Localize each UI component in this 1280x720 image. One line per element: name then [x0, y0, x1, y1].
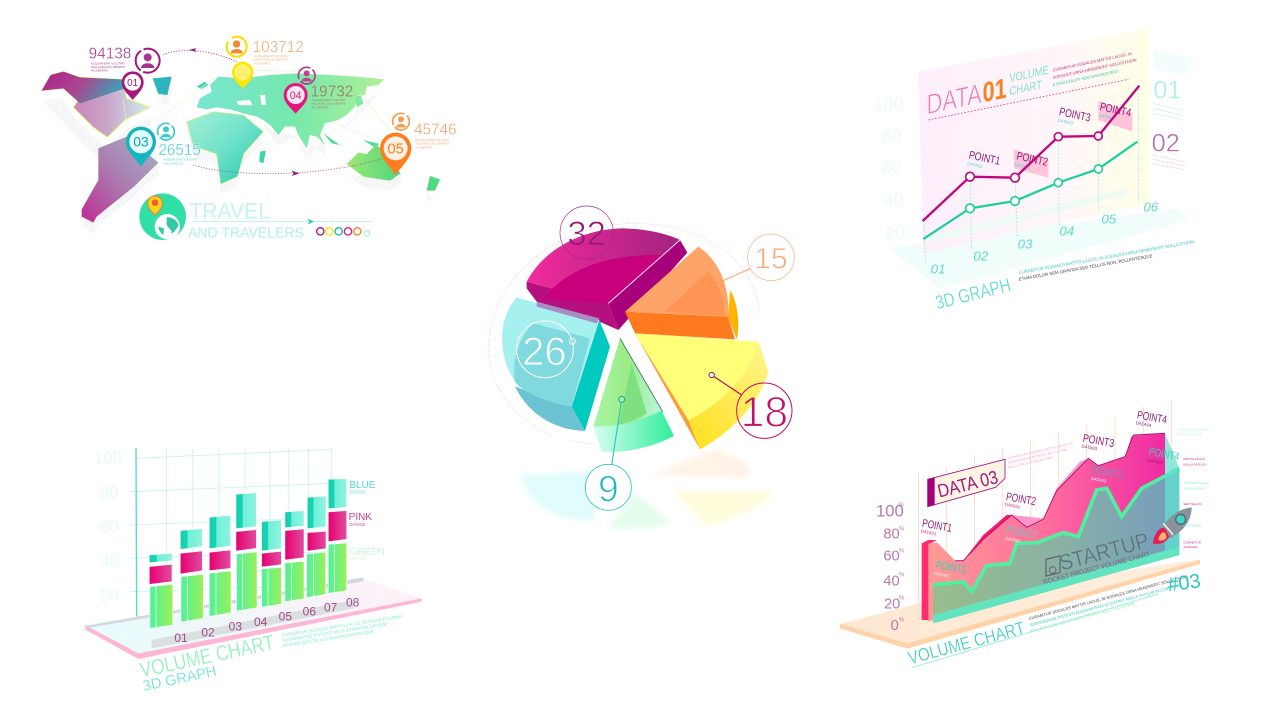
- caption note: SUSPENDISSE POTENTI VELIT ETIAM DOLOR SEM: [282, 621, 387, 643]
- caption: volume chart: VOLUME CHART: [138, 630, 276, 682]
- caption: volume chart: [906, 594, 1158, 668]
- stat 103712: NULLA FACILISI LOBORTIS: [254, 58, 288, 62]
- vertical guide lines: [918, 400, 1171, 622]
- island: madagascar: [259, 151, 266, 163]
- y axis labels: 60: [883, 549, 900, 565]
- heading: DATA01 volume chart: DATA: [927, 77, 982, 120]
- heading note: SODALES URNA HENDRERIT SOLLICITUDIN: [1053, 57, 1137, 80]
- green line series: [923, 142, 1137, 239]
- bar 06: [285, 511, 304, 602]
- point labels: DATA03: [1081, 444, 1098, 451]
- callout 18: [709, 372, 793, 438]
- person icon 03: [158, 123, 174, 140]
- point labels: POINT3: [1082, 433, 1115, 450]
- y axis labels: 60: [882, 156, 902, 178]
- x axis strip: 06: [303, 605, 316, 619]
- startup title: ROCKET PROJECT VOLUME CHART: [1043, 551, 1151, 586]
- y axis labels: %: [899, 527, 905, 533]
- pin 02: [232, 62, 253, 88]
- point labels: POINT3: [1091, 464, 1124, 482]
- stat 26515: NULLA FACILISI: [163, 161, 183, 165]
- continent: australia: [347, 144, 401, 181]
- y axis labels: 80: [882, 125, 902, 147]
- x axis strip: 03: [229, 620, 242, 634]
- legend 02: 02: [1152, 130, 1180, 158]
- stat 103712: 103712: [253, 39, 304, 56]
- x axis strip: 07: [324, 601, 338, 615]
- pin 01: 01: [127, 78, 139, 89]
- point labels: [967, 101, 1132, 173]
- callout 32: [557, 206, 617, 261]
- bar 08: [328, 479, 347, 593]
- x axis strip: 04: [254, 615, 268, 629]
- islands: indonesia: [323, 133, 380, 147]
- side notes: MATTIS LACUS IN: [1177, 432, 1202, 436]
- continent: eurasia: [197, 73, 384, 148]
- point labels: POINT3: [1058, 106, 1092, 125]
- title: travel and travelers: TRAVEL: [189, 199, 270, 224]
- wall reflection: [927, 188, 1127, 243]
- y axis labels: 40: [100, 551, 119, 571]
- continent: new zealand: [427, 176, 440, 191]
- badge note: SUSPENDISSE POTENTI VELIT ETIAM: [1008, 447, 1067, 465]
- side notes: CURABITUR: [1183, 540, 1202, 544]
- bar 07: [307, 496, 326, 598]
- caption note: GRAVIDA SED TELLUS NON PELLENTESQUE: [282, 629, 374, 648]
- y axis labels: %: [899, 595, 905, 601]
- floor: [85, 577, 422, 659]
- point labels: POINT4: [1148, 446, 1180, 463]
- point labels: DATA04: [1135, 420, 1152, 428]
- y axis labels: 20: [885, 223, 905, 245]
- pin 03: 03: [133, 134, 149, 150]
- point labels: [920, 409, 1180, 581]
- caption: volume chart: 3D GRAPH: [142, 664, 218, 695]
- caption: volume chart: [138, 630, 276, 695]
- y axis labels: 80: [883, 526, 900, 542]
- pin 05: [380, 133, 411, 175]
- stat 94138: ALIQUAM ERAT VOLUTPAT: [91, 61, 125, 65]
- caption note: CURABITUR SODALES MATTIS LACUS, IN SODALES URNA HENDRERIT SOLLICITUDIN: [1028, 574, 1188, 621]
- side notes: ALIQUAM ERAT: [1183, 486, 1206, 490]
- heading note: CURABITUR SODALES MATTIS LACUS, IN: [1053, 51, 1132, 73]
- bar 04: [236, 493, 257, 611]
- stat 45746: NULLA FACILISI LOBORTIS: [415, 142, 449, 146]
- legend: pink: PINK: [349, 512, 372, 523]
- y axis labels: %: [899, 549, 905, 555]
- pin 01: [122, 71, 144, 100]
- y axis labels: %: [899, 618, 905, 624]
- continent: africa: [187, 112, 263, 184]
- x axis labels: 01: [931, 261, 945, 276]
- slice: magenta 32: [527, 228, 687, 330]
- side notes: NULLA FACILISI: [1183, 462, 1206, 466]
- slice: yellow 18: [635, 333, 768, 449]
- bar 05: [262, 520, 281, 607]
- caption note: CURABITUR SODALES MATTIS LACUS, IN SODALES URNA: [282, 614, 402, 638]
- dashed orbit ring: [488, 223, 760, 444]
- panel: 3D stacked bar chart: [85, 447, 422, 695]
- badge: DATA 03: DATA 03: [935, 466, 1000, 502]
- floor: [840, 559, 1200, 649]
- slice: teal 26: [502, 297, 610, 431]
- continent: greenland: [153, 77, 172, 95]
- slice: orange 15: [625, 247, 738, 339]
- pin 04: [284, 83, 308, 114]
- point labels: POINT4: [1099, 101, 1132, 120]
- y axis labels: 40: [883, 573, 900, 589]
- panel: world map travel: [42, 37, 457, 241]
- stat 45746: ALIQUAM ERAT VOLUTPAT: [415, 138, 450, 142]
- stat 45746: [414, 122, 457, 149]
- legend: green: GREEN: [349, 547, 385, 558]
- point labels: DATA02: [1005, 536, 1022, 544]
- grid lines: [130, 448, 333, 610]
- person icon 04: [298, 67, 315, 84]
- side notes: SODALES: [1183, 545, 1197, 549]
- x axis labels: 05: [1101, 211, 1117, 226]
- caption note: NULLA FACILISI DOLOR SEM GRAVIDA SED TELLUS NON: [1029, 601, 1135, 634]
- heading: DATA01 volume chart: 01: [983, 72, 1007, 108]
- point labels: DATA03: [1057, 118, 1074, 126]
- stat 94138: [89, 46, 131, 73]
- y axis labels: 80: [100, 483, 119, 503]
- bar 01: [149, 553, 173, 628]
- y axis labels: 100: [876, 502, 904, 521]
- x axis strip: 02: [201, 625, 215, 639]
- stat 103712: IN LOBORTIS: [254, 61, 271, 65]
- stat 19732: NULLA FACILISI LOBORTIS: [312, 102, 346, 106]
- x axis strip: [152, 596, 360, 648]
- legend: pink: DATA02: [349, 522, 366, 527]
- point labels: POINT2: [1015, 151, 1049, 169]
- legend 01: [1153, 48, 1193, 120]
- continent: south america: [82, 137, 158, 223]
- side notes: DOLOR SEM: [1183, 524, 1202, 528]
- title: travel and travelers: [188, 199, 373, 241]
- point labels: POINT4: [1136, 409, 1168, 426]
- label: #03: #03: [1166, 570, 1202, 597]
- rocket icon: [1153, 507, 1192, 544]
- flight route north: [163, 50, 237, 62]
- back wall: [918, 28, 1150, 253]
- person icon 01: [136, 49, 160, 73]
- stat 19732: ALIQUAM ERAT VOLUTPAT: [312, 98, 346, 102]
- x axis labels: [931, 200, 1159, 276]
- x axis labels: 03: [1018, 236, 1033, 251]
- badge: DATA 03: [928, 459, 1005, 507]
- point labels: POINT2: [1005, 524, 1038, 542]
- point labels: POINT1: [968, 150, 1001, 168]
- stat 45746: 45746: [414, 122, 457, 139]
- map shadows: [42, 77, 435, 233]
- badge note: NULLA FACILISI DOLOR SEM: [1008, 455, 1053, 470]
- point labels: DATA01: [934, 571, 951, 579]
- point labels: POINT1: [921, 518, 953, 535]
- title: travel and travelers: AND TRAVELERS: [188, 224, 304, 241]
- bar 02: [180, 529, 203, 622]
- y axis labels: 100: [873, 93, 903, 116]
- legend pins: [317, 228, 370, 236]
- plane icon north: [189, 48, 197, 52]
- heading: DATA01 volume chart: VOLUME: [1009, 63, 1049, 85]
- startup title: STARTUP: [1056, 528, 1152, 575]
- travel badge icon: [139, 193, 186, 240]
- y axis labels: 20: [884, 596, 900, 612]
- callout 9: [585, 396, 631, 510]
- legend 02: [1152, 130, 1185, 170]
- stat 94138: 94138: [89, 46, 131, 63]
- point labels: DATA04: [1147, 458, 1164, 465]
- panel: 3D area chart startup: [840, 400, 1209, 668]
- caption note: [282, 614, 402, 648]
- caption: volume chart: VOLUME CHART: [906, 618, 1027, 668]
- stat 94138: NULLA FACILISI LOBORTIS: [91, 65, 125, 69]
- callout 15: 15: [754, 242, 788, 275]
- callout 15: [710, 234, 794, 288]
- panel: 3D pie chart: [488, 206, 794, 529]
- stat 19732: IN LOBORTIS: [312, 105, 329, 109]
- heading: DATA01 volume chart: CHART: [1009, 78, 1042, 98]
- y axis labels: 60: [100, 517, 119, 537]
- panel: 3D line graph: [873, 28, 1195, 314]
- y axis labels: [873, 93, 905, 246]
- side notes: MATTIS LACUS: [1183, 457, 1205, 461]
- pie reflection: [520, 448, 775, 529]
- stat 26515: 26515: [158, 142, 201, 159]
- stat 94138: IN LOBORTIS: [91, 69, 108, 73]
- x axis strip: 05: [279, 609, 292, 623]
- badge note: [1008, 441, 1074, 470]
- point labels: DATA02: [1004, 502, 1021, 510]
- startup title: [1043, 528, 1152, 586]
- heading note: ETIAM DOLOR SEM GRAVIDA SED: [1053, 69, 1118, 87]
- side notes: CURABITUR SODALES: [1177, 428, 1209, 432]
- point labels: DATA02: [1014, 162, 1031, 170]
- stat 103712: ALIQUAM ERAT VOLUTPAT: [254, 54, 288, 58]
- callout 9: 9: [598, 467, 619, 509]
- slice: green 9: [593, 338, 674, 452]
- pin 03: [126, 127, 156, 166]
- y axis labels: 0: [891, 618, 899, 634]
- y axis labels: %: [898, 503, 904, 509]
- person icon 05: [393, 113, 409, 130]
- plane icon south: [292, 171, 299, 176]
- pink area: [922, 433, 1165, 622]
- heading: DATA01 volume chart: [927, 63, 1049, 120]
- side notes: SED TELLUS: [1183, 502, 1202, 506]
- point labels: DATA04: [1098, 113, 1115, 121]
- magenta line series: [923, 86, 1139, 221]
- caption: 3D graph: ETIAM DOLOR SEM GRAVIDA SED TELLUS NON, PELLENTESQUE: [1018, 253, 1153, 282]
- person icon 02: [227, 37, 247, 57]
- y axis line: [134, 448, 139, 618]
- point labels: DATA01: [920, 529, 937, 536]
- legend 01: 01: [1153, 76, 1182, 104]
- continent: north america: [42, 72, 150, 137]
- dashed heading rule: [928, 79, 1128, 120]
- side notes: VOLUTPAT NULLA: [1183, 481, 1209, 485]
- stat 19732: [311, 83, 353, 109]
- side notes: [1177, 428, 1209, 549]
- point highlight boxes: [1014, 101, 1132, 178]
- legend: blue: DATA01: [350, 489, 366, 494]
- y axis labels: [876, 502, 905, 634]
- y axis labels: %: [899, 573, 905, 579]
- x axis labels: 04: [1059, 224, 1074, 239]
- point labels: DATA01: [967, 161, 984, 169]
- caption: 3D graph: CURABITUR SODALES MATTIS LACUS, IN SODALES URNA HENDRERIT SOLLICITUDIN: [1018, 239, 1195, 275]
- heading note: [1053, 50, 1137, 87]
- x axis strip: 08: [346, 596, 360, 610]
- stat 19732: 19732: [311, 83, 353, 100]
- teal area: [933, 433, 1179, 623]
- pin 04: 04: [290, 90, 302, 102]
- caption: 3D graph: 3D GRAPH: [933, 275, 1013, 314]
- pin 05: 05: [388, 142, 404, 158]
- flight route south: [193, 158, 383, 174]
- y axis labels: 20: [100, 585, 119, 605]
- faint connectors: [123, 70, 390, 143]
- caption: 3D graph: [933, 239, 1195, 314]
- legend: green: DATA03: [350, 556, 366, 561]
- x axis strip: 01: [174, 631, 188, 645]
- stat 45746: IN LOBORTIS: [415, 145, 432, 149]
- point labels: POINT1: [935, 559, 967, 577]
- x axis labels: 06: [1143, 200, 1159, 215]
- x axis labels: 02: [973, 249, 989, 264]
- drop lines: [923, 86, 1138, 263]
- caption note: SUSPENDISSE POTENTI ALIQUAM ERAT VOLUTPAT NULLA FACILISI IN LOBORTIS: [1029, 582, 1181, 628]
- pin 02: 02: [237, 68, 249, 79]
- y axis labels: 40: [883, 189, 903, 212]
- y axis labels: [94, 447, 122, 606]
- callout 26: [517, 321, 575, 378]
- y axis labels: 100: [94, 447, 122, 468]
- stat 103712: [253, 39, 304, 65]
- badge note: CURABITUR SODALES MATTIS LACUS, IN: [1008, 441, 1074, 460]
- floor: [888, 208, 1188, 288]
- point labels: POINT2: [1005, 491, 1037, 508]
- bar 03: [209, 515, 231, 616]
- point labels: DATA03: [1090, 476, 1107, 484]
- legend: blue: BLUE: [349, 480, 376, 491]
- stat 26515: ALIQUAM ERAT VOLUTPAT: [163, 158, 198, 162]
